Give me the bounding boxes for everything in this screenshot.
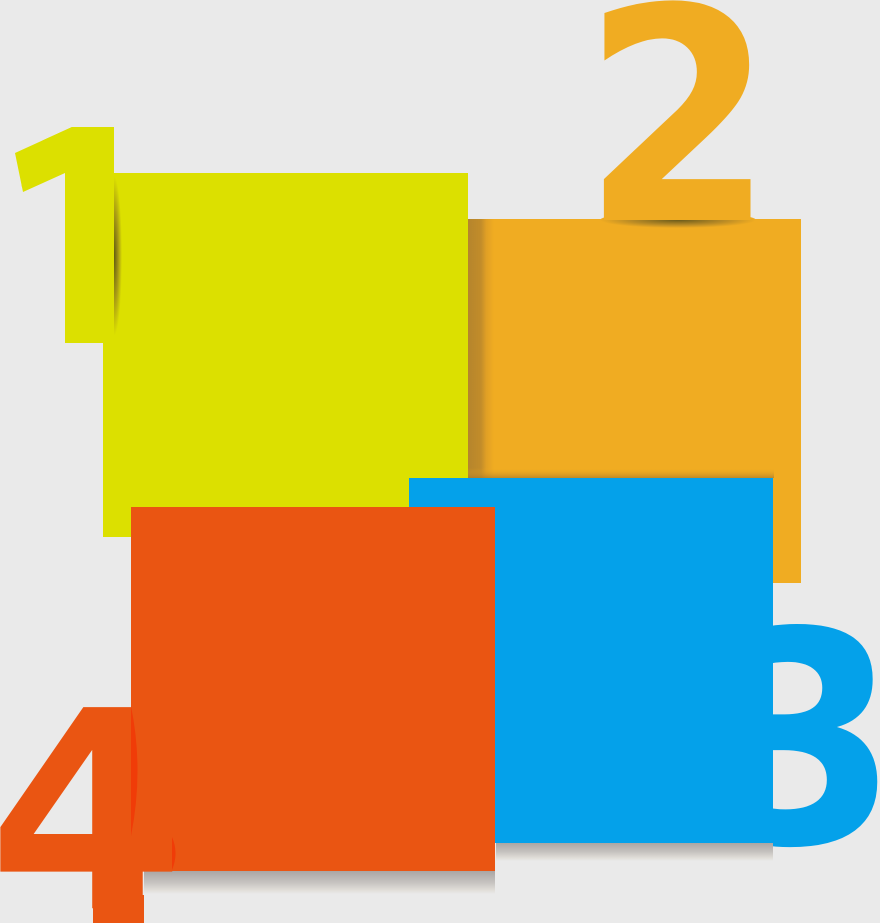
number 1: 1 <box>0 51 175 402</box>
panel: blue square 3 <box>409 478 773 843</box>
number 4 stem base <box>93 895 144 923</box>
panel: red square 4 <box>131 507 495 871</box>
drop shadow under red square <box>144 871 495 894</box>
panel: yellow square 1 <box>103 173 468 537</box>
highlight beside number 4 <box>131 706 138 836</box>
shadow beside number 1 <box>106 176 122 336</box>
small highlight beside number 4 foot <box>172 837 176 870</box>
panel: orange square 2 <box>468 219 801 583</box>
shadow under number 2 <box>600 212 756 228</box>
drop shadow under blue square <box>496 843 773 861</box>
